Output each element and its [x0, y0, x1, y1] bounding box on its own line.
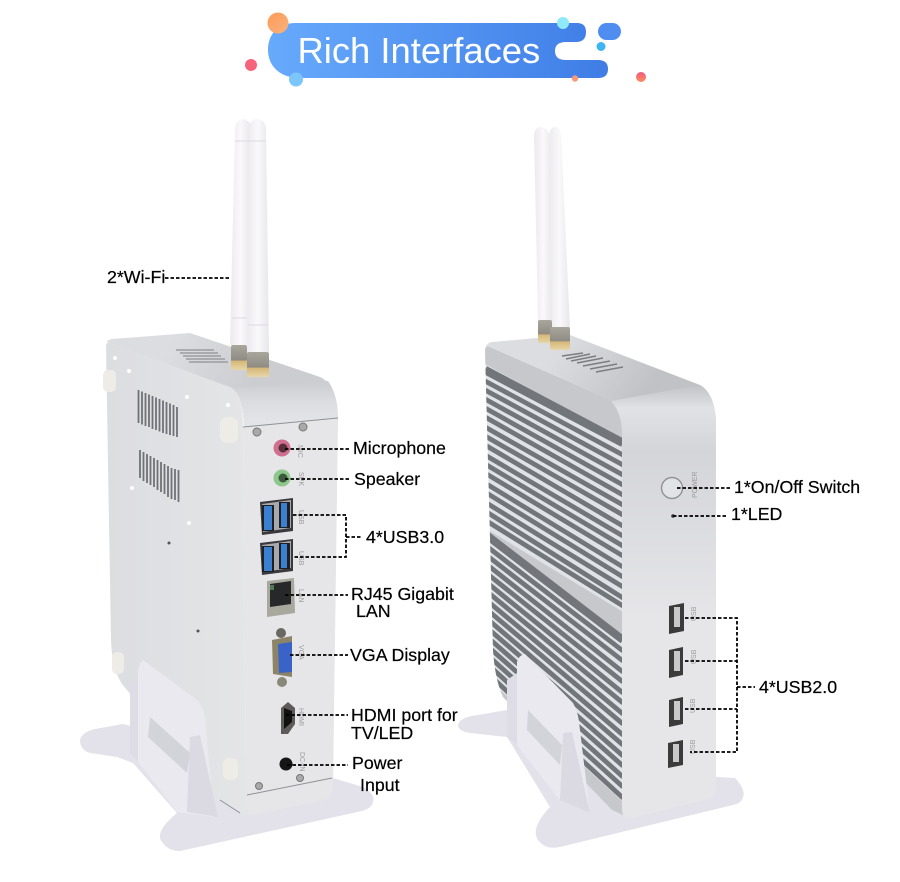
port captions: USB: [297, 551, 304, 566]
microphone jack: [274, 440, 290, 456]
port captions: USB: [691, 606, 698, 621]
label: usb 3.0: 4*USB3.0: [366, 527, 444, 547]
label: power input: Power: [352, 753, 402, 773]
vga port: [272, 628, 292, 687]
banner shape: [268, 23, 608, 78]
label: usb 2.0: 4*USB2.0: [759, 677, 837, 697]
left chassis side: [106, 343, 246, 815]
port captions: USB: [690, 739, 697, 754]
led: [671, 514, 675, 518]
label: speaker: Speaker: [354, 469, 420, 489]
side vents upper: [138, 390, 177, 437]
port captions: MIC: [296, 445, 303, 458]
right chassis front: [611, 385, 716, 818]
left chassis top: [107, 333, 338, 427]
label: hdmi: TV/LED: [351, 723, 413, 743]
label: hdmi: HDMI port for: [351, 705, 458, 725]
port captions: LAN: [297, 589, 304, 603]
label: on/off switch: 1*On/Off Switch: [734, 477, 860, 497]
banner dots: [245, 12, 646, 86]
screws: [253, 423, 307, 790]
port captions: [690, 472, 699, 754]
panel edges: [220, 418, 338, 813]
port captions: USB: [297, 510, 304, 525]
right stand base: [458, 710, 744, 848]
speaker jack: [274, 470, 290, 486]
dashed leader lines: [165, 278, 755, 765]
right chassis stripes face: [485, 345, 623, 820]
port captions: HDMI: [297, 708, 304, 726]
title text: Rich Interfaces: [298, 30, 540, 71]
label: rj45: RJ45 Gigabit: [351, 584, 454, 604]
usb 3.0 ports: [260, 498, 293, 575]
label: rj45: LAN: [356, 601, 391, 621]
rj45 port: [267, 578, 295, 617]
right stand upright: [507, 654, 590, 813]
title banner: [245, 12, 646, 86]
usb 2.0 ports: [668, 603, 684, 768]
left device: [80, 119, 374, 851]
right device: [458, 127, 744, 848]
label: microphone: Microphone: [353, 438, 446, 458]
label: led: 1*LED: [731, 504, 782, 524]
stand cutout: [527, 710, 562, 765]
rubber feet: [103, 370, 238, 780]
left chassis front: [232, 381, 338, 427]
usb slots: [673, 607, 680, 762]
port captions: [296, 445, 305, 771]
left stand base: [80, 724, 374, 851]
stand cutout: [148, 717, 190, 773]
label: wi-fi: 2*Wi-Fi: [107, 267, 165, 287]
right antennas: [534, 127, 570, 350]
side vents lower: [140, 450, 178, 502]
hdmi port: [281, 702, 295, 734]
label: vga: VGA Display: [350, 645, 450, 665]
bevel and gap panels: [485, 345, 623, 820]
port captions: USB: [690, 698, 697, 713]
left stand upright: [130, 660, 218, 817]
right chassis top: [485, 335, 716, 425]
port captions: USB: [691, 649, 698, 664]
power button: [662, 478, 682, 498]
top vents: [176, 350, 228, 362]
banner blob: [598, 23, 621, 40]
port captions: POWER: [692, 472, 699, 498]
front panel: [243, 418, 338, 815]
left antennas: [230, 119, 269, 377]
top vents: [562, 353, 623, 372]
power jack: [280, 758, 292, 770]
mounting holes: [113, 356, 230, 632]
port captions: DC-IN: [298, 752, 305, 771]
port captions: VGA: [297, 645, 304, 660]
port captions: SPK: [297, 472, 304, 486]
label: power input: Input: [360, 775, 400, 795]
